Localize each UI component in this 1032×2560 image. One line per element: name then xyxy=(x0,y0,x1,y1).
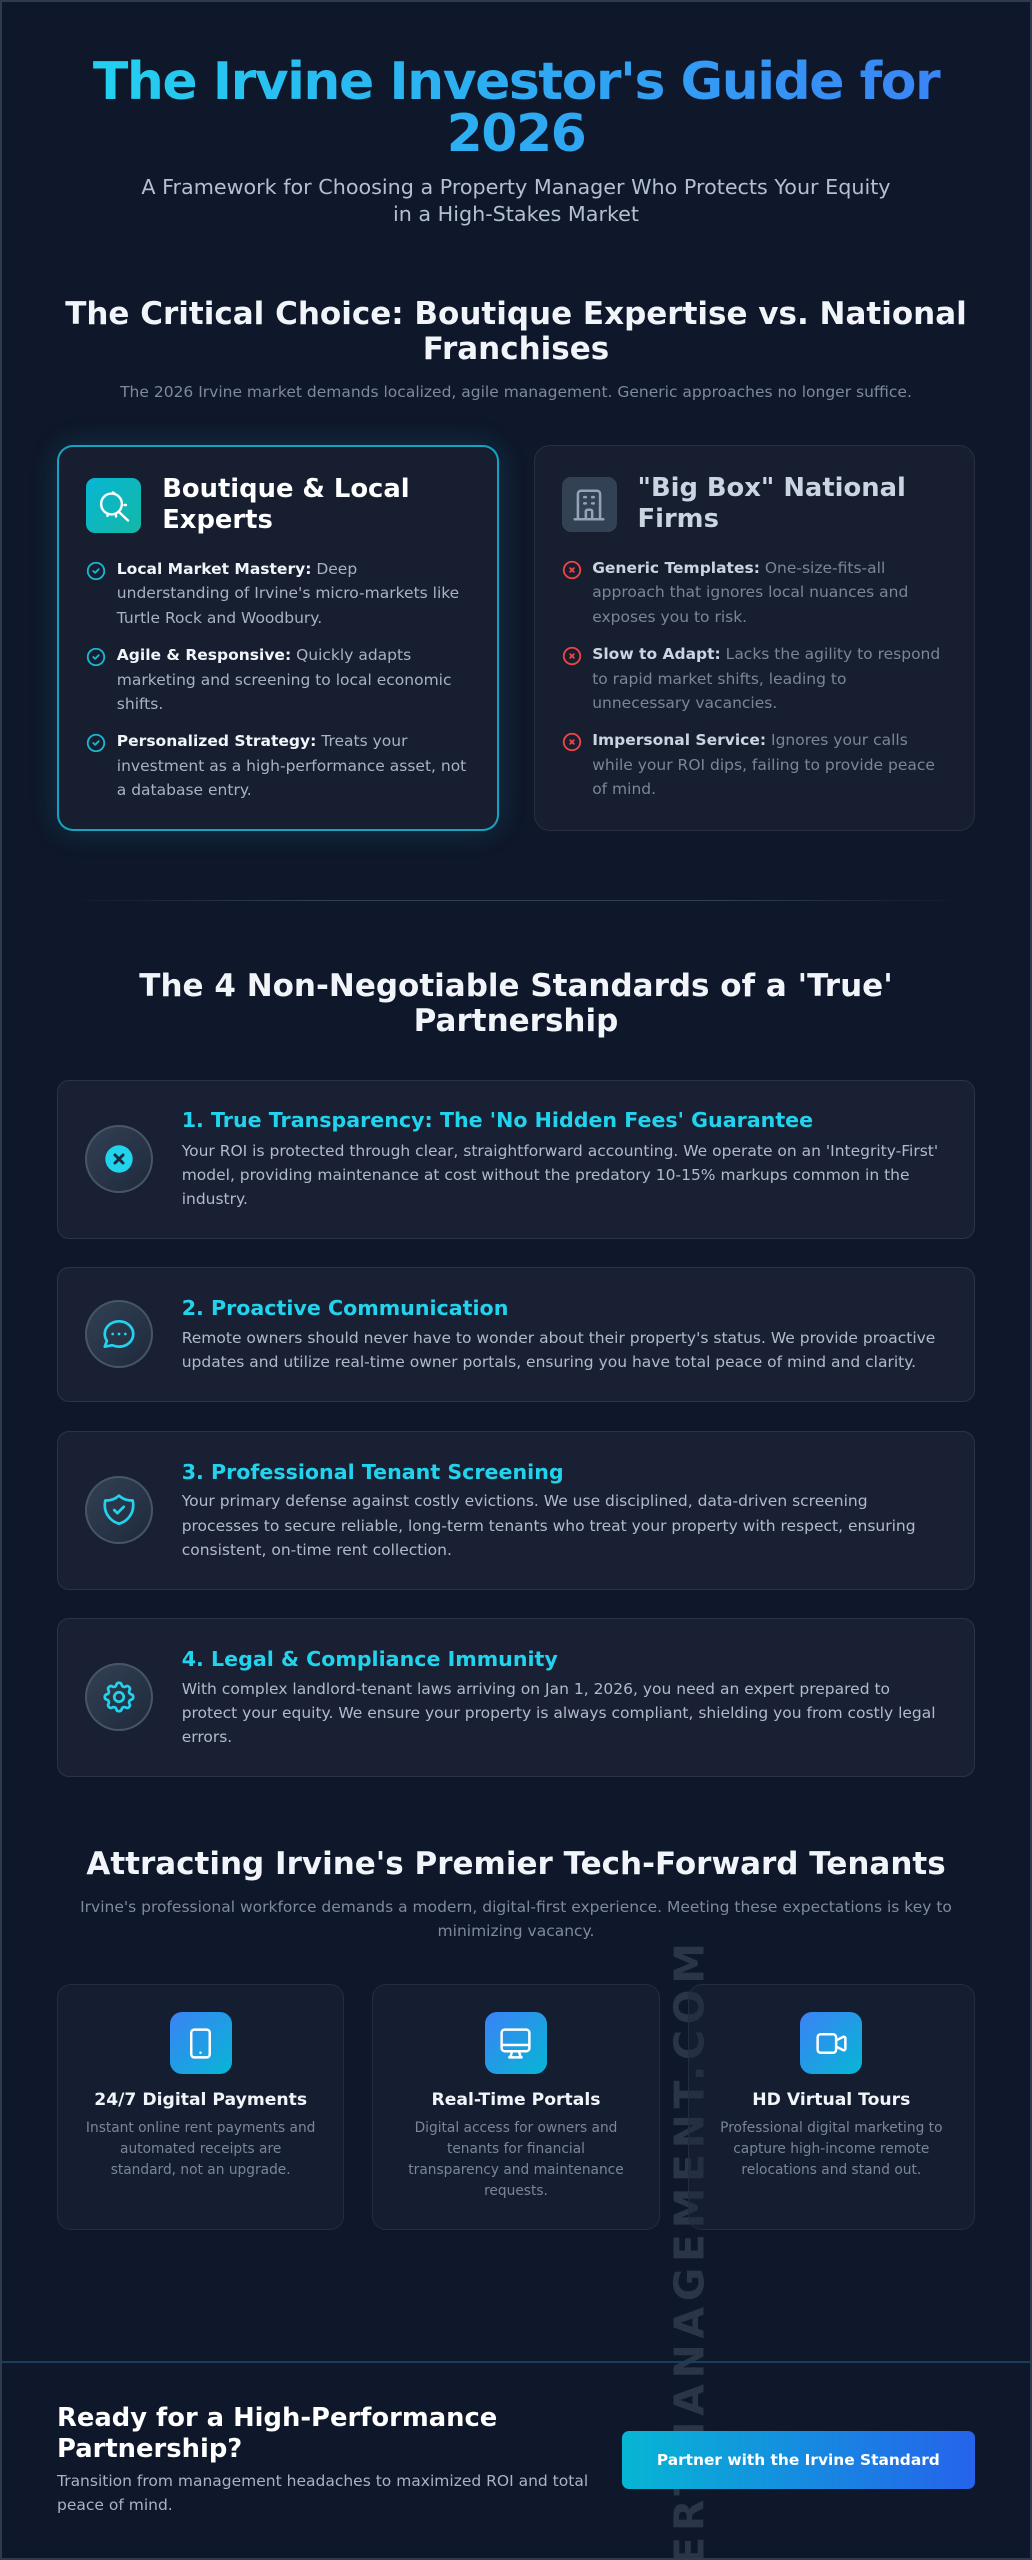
heading: boutique: Experts xyxy=(162,505,273,535)
section description: tech-forward tenants xyxy=(80,1898,952,1940)
standard title: 1. True Transparency: The 'No Hidden Fees' Guarantee xyxy=(182,1108,813,1132)
standard text: With complex landlord-tenant laws arriving on Jan 1, 2026, you need an expert prepared to xyxy=(182,1680,890,1698)
cta button: Partner with the Irvine Standard xyxy=(657,2451,940,2469)
card text: relocations and stand out. xyxy=(741,2162,921,2178)
cta text xyxy=(56,2472,588,2514)
section description: critical choice: The 2026 Irvine market demands localized, agile management. Generic approaches no longer suffice. xyxy=(120,382,912,400)
standard text: updates and utilize real-time owner portals, ensuring you have total peace of mind and clarity. xyxy=(182,1353,916,1371)
list item: personalized strategy: a database entry. xyxy=(117,781,252,799)
card text: capture high-income remote xyxy=(733,2141,929,2157)
card text: requests. xyxy=(484,2183,548,2199)
standard text: Your primary defense against costly evictions. We use disciplined, data-driven screening xyxy=(182,1492,868,1510)
icon: magnifier xyxy=(86,478,141,533)
icon: video camera xyxy=(800,2012,862,2074)
title: 2026 xyxy=(447,104,585,164)
card text: Instant online rent payments and xyxy=(86,2120,315,2136)
list item: local market mastery: Turtle Rock and Woodbury. xyxy=(117,609,322,627)
list item: agile and responsive xyxy=(86,646,452,713)
list item: local market mastery: understanding of Irvine's micro-markets like xyxy=(117,584,459,602)
standard text: Remote owners should never have to wonder about their property's status. We provide proactive xyxy=(182,1329,935,1347)
list item: personalized strategy: investment as a high-performance asset, not xyxy=(117,757,466,775)
card text: Professional digital marketing to xyxy=(720,2120,942,2136)
list item: impersonal service: Impersonal Service: Ignores your calls xyxy=(592,731,908,749)
list item: slow to adapt: to rapid market shifts, leading to xyxy=(592,670,846,688)
title xyxy=(57,56,975,161)
card text: automated receipts are xyxy=(120,2141,281,2157)
heading: the critical choice: The Critical Choice: Boutique Expertise vs. National xyxy=(65,296,967,332)
panel: boutique and local experts xyxy=(57,445,498,831)
card title: 24/7 Digital Payments xyxy=(94,2090,307,2110)
card title: Real-Time Portals xyxy=(432,2090,600,2110)
standard text: model, providing maintenance at cost without the predatory 10-15% markups common in the xyxy=(182,1166,910,1184)
subtitle xyxy=(141,174,891,226)
card text: transparency and maintenance xyxy=(408,2162,624,2178)
standard text: errors. xyxy=(182,1728,232,1746)
list item: impersonal service xyxy=(562,731,935,798)
icon: office building xyxy=(562,477,616,532)
list item: personalized strategy: Personalized Strategy: Treats your xyxy=(117,732,407,750)
panel: call to action footer xyxy=(0,2360,1032,2560)
panel: virtual tours xyxy=(688,1984,975,2230)
card text: Digital access for owners and xyxy=(415,2120,617,2136)
list item: agile and responsive: shifts. xyxy=(117,695,163,713)
card text: tenants for financial xyxy=(447,2141,585,2157)
standard title: 4. Legal & Compliance Immunity xyxy=(182,1647,558,1671)
icon: solid x circle xyxy=(85,1125,153,1193)
list item: impersonal service: of mind. xyxy=(592,780,656,798)
standard text: processes to secure reliable, long-term tenants who treat your property with respect, ensuring xyxy=(182,1517,916,1535)
card title: HD Virtual Tours xyxy=(752,2090,910,2110)
standard text: Your ROI is protected through clear, straightforward accounting. We operate on an 'Integrity-First' xyxy=(182,1142,938,1160)
list item: impersonal service: while your ROI dips, failing to provide peace xyxy=(592,756,935,774)
subtitle: A Framework for Choosing a Property Manager Who Protects Your Equity xyxy=(141,174,891,198)
list item: slow to adapt: Slow to Adapt: Lacks the agility to respond xyxy=(592,645,940,663)
cta text: Transition from management headaches to maximized ROI and total xyxy=(57,2472,588,2490)
heading: the critical choice: Franchises xyxy=(423,331,609,367)
heading: four standards: The 4 Non-Negotiable Standards of a 'True' xyxy=(139,968,893,1004)
heading: big box: "Big Box" National xyxy=(638,473,906,503)
panel: digital payments xyxy=(57,1984,344,2230)
card text xyxy=(408,2120,624,2199)
card text: standard, not an upgrade. xyxy=(111,2162,291,2178)
card text xyxy=(720,2120,942,2178)
list item: generic templates: approach that ignores local nuances and xyxy=(592,583,908,601)
card text xyxy=(86,2120,315,2178)
standard text: consistent, on-time rent collection. xyxy=(182,1541,452,1559)
panel: standard 4 legal and compliance xyxy=(57,1618,975,1777)
list item: generic templates: exposes you to risk. xyxy=(592,608,747,626)
heading: four standards: Partnership xyxy=(414,1002,618,1038)
standard text xyxy=(182,1680,936,1746)
cta text: peace of mind. xyxy=(57,2496,173,2514)
list item: agile and responsive: Agile & Responsive: Quickly adapts xyxy=(117,646,411,664)
list item: slow to adapt xyxy=(562,645,940,712)
icon: phone xyxy=(170,2012,232,2074)
cta heading xyxy=(57,2403,497,2464)
panel: big box national firms xyxy=(534,445,975,831)
icon: gear xyxy=(85,1663,153,1731)
panel: standard 2 proactive communication xyxy=(57,1266,975,1402)
list item: local market mastery xyxy=(86,560,459,627)
heading: four standards xyxy=(139,968,893,1038)
standard text xyxy=(182,1492,916,1559)
list item: slow to adapt: unnecessary vacancies. xyxy=(592,694,777,712)
panel: standard 1 true transparency xyxy=(57,1080,975,1238)
cta heading: Partnership? xyxy=(57,2434,242,2464)
heading: big box: Firms xyxy=(638,504,719,534)
standard text: protect your equity. We ensure your property is always compliant, shielding you from costly legal xyxy=(182,1704,936,1722)
heading: big box xyxy=(638,473,906,534)
cta button xyxy=(622,2431,975,2489)
list item: local market mastery: Local Market Mastery: Deep xyxy=(117,560,357,578)
list item: generic templates: Generic Templates: One-size-fits-all xyxy=(592,559,885,577)
icon: desktop monitor xyxy=(485,2012,547,2074)
standard text xyxy=(182,1142,938,1208)
title: The Irvine Investor's Guide for xyxy=(93,52,939,112)
standard text xyxy=(182,1329,935,1371)
panel: real-time portals xyxy=(372,1984,660,2230)
standard title: 3. Professional Tenant Screening xyxy=(182,1460,564,1484)
list item: agile and responsive: marketing and screening to local economic xyxy=(117,671,452,689)
subtitle: in a High-Stakes Market xyxy=(393,202,639,226)
list item: generic templates xyxy=(562,559,908,626)
section description: tech-forward tenants: Irvine's professional workforce demands a modern, digital-first experience. Meeting these expectations is key to xyxy=(80,1898,952,1916)
heading: boutique xyxy=(162,474,410,535)
heading: the critical choice xyxy=(65,296,967,367)
standard text: industry. xyxy=(182,1190,248,1208)
heading: tech-forward tenants: Attracting Irvine's Premier Tech-Forward Tenants xyxy=(86,1846,946,1882)
section description: tech-forward tenants: minimizing vacancy. xyxy=(438,1922,594,1940)
heading: boutique: Boutique & Local xyxy=(162,474,410,504)
list item: personalized strategy xyxy=(86,732,466,799)
standard title: 2. Proactive Communication xyxy=(182,1296,508,1320)
panel: standard 3 tenant screening xyxy=(57,1430,975,1590)
cta heading: Ready for a High-Performance xyxy=(57,2403,497,2433)
icon: chat bubble xyxy=(85,1300,153,1368)
icon: shield check xyxy=(85,1476,153,1544)
